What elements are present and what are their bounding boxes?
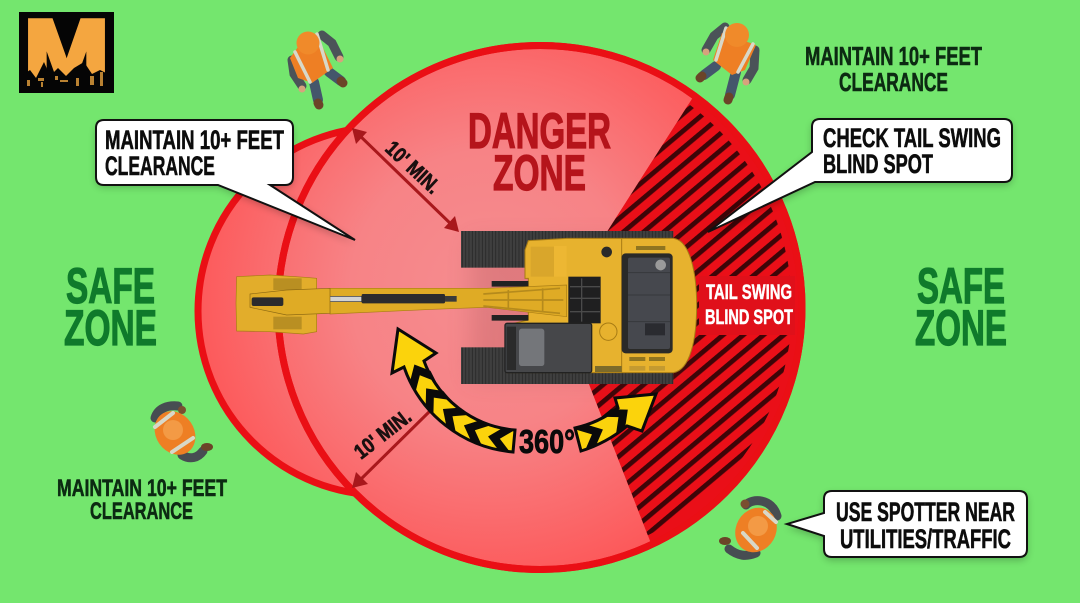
label: tail swing blind spot [699, 276, 795, 335]
heading: danger zone: ZONE [493, 145, 586, 201]
heading: right safe zone: SAFE [917, 258, 1005, 314]
stick cylinder [313, 294, 457, 303]
text: maintain clearance bottom left [57, 475, 227, 525]
callout: check tail swing: BLIND SPOT [823, 149, 933, 179]
top track [461, 231, 673, 268]
main danger circle [278, 46, 802, 570]
callout: maintain clearance left [96, 120, 355, 243]
callout: maintain clearance left: MAINTAIN 10+ FEET [105, 125, 284, 155]
text: maintain clearance top right [805, 41, 982, 97]
heading: right safe zone [915, 258, 1007, 356]
label: tail swing blind spot: TAIL SWING [706, 281, 792, 304]
operator cab [505, 323, 592, 373]
danger circle rim [278, 46, 802, 570]
callout: check tail swing: CHECK TAIL SWING [823, 123, 1001, 153]
label: top 10 ft minimum arrow: 10' MIN. [381, 137, 445, 199]
label: top 10 ft minimum arrow [352, 128, 459, 232]
bottom track [461, 347, 673, 384]
right swing arrow [575, 394, 656, 451]
label: tail swing blind spot: BLIND SPOT [705, 306, 793, 329]
icon: worker bottom left [146, 403, 213, 463]
boom [330, 285, 567, 317]
boom cylinder mounts [492, 281, 528, 321]
excavator top view [236, 231, 697, 384]
heading: danger zone [468, 103, 611, 201]
hatched blind spot sector [589, 98, 798, 542]
callout: maintain clearance left: CLEARANCE [105, 151, 215, 181]
heading: left safe zone: ZONE [64, 300, 157, 356]
text: maintain clearance top right: CLEARANCE [839, 67, 948, 97]
left swing arrow [392, 329, 515, 453]
icon: worker bottom right [719, 500, 785, 560]
callout: use spotter [787, 491, 1027, 560]
text: maintain clearance top right: MAINTAIN 10+ FEET [805, 41, 982, 71]
label: bottom 10 ft minimum arrow [350, 405, 430, 488]
label: bottom 10 ft minimum arrow: 10' MIN. [350, 405, 416, 464]
excavator shadow [470, 240, 685, 380]
text: maintain clearance bottom left: CLEARANCE [90, 498, 193, 525]
panel: danger zones [198, 46, 802, 570]
icon: worker top left [290, 32, 344, 105]
heading: left safe zone: SAFE [66, 258, 155, 314]
bucket [236, 275, 330, 334]
text: maintain clearance bottom left: MAINTAIN 10+ FEET [57, 475, 227, 502]
machinery bay [568, 277, 601, 323]
callout: check tail swing [708, 119, 1012, 235]
360 degree label: 360° [519, 423, 575, 460]
body panels [531, 239, 665, 373]
heading: right safe zone: ZONE [915, 300, 1007, 356]
left swing circle [198, 127, 566, 495]
hydraulic lines [483, 288, 563, 313]
icon: worker top right [700, 23, 756, 100]
machine body [507, 238, 697, 373]
engine cover [622, 253, 673, 353]
arrow: 360 degree swing [392, 329, 656, 460]
logo: M [24, 2, 109, 104]
heading: left safe zone [64, 258, 157, 356]
heading: danger zone: DANGER [468, 103, 611, 159]
